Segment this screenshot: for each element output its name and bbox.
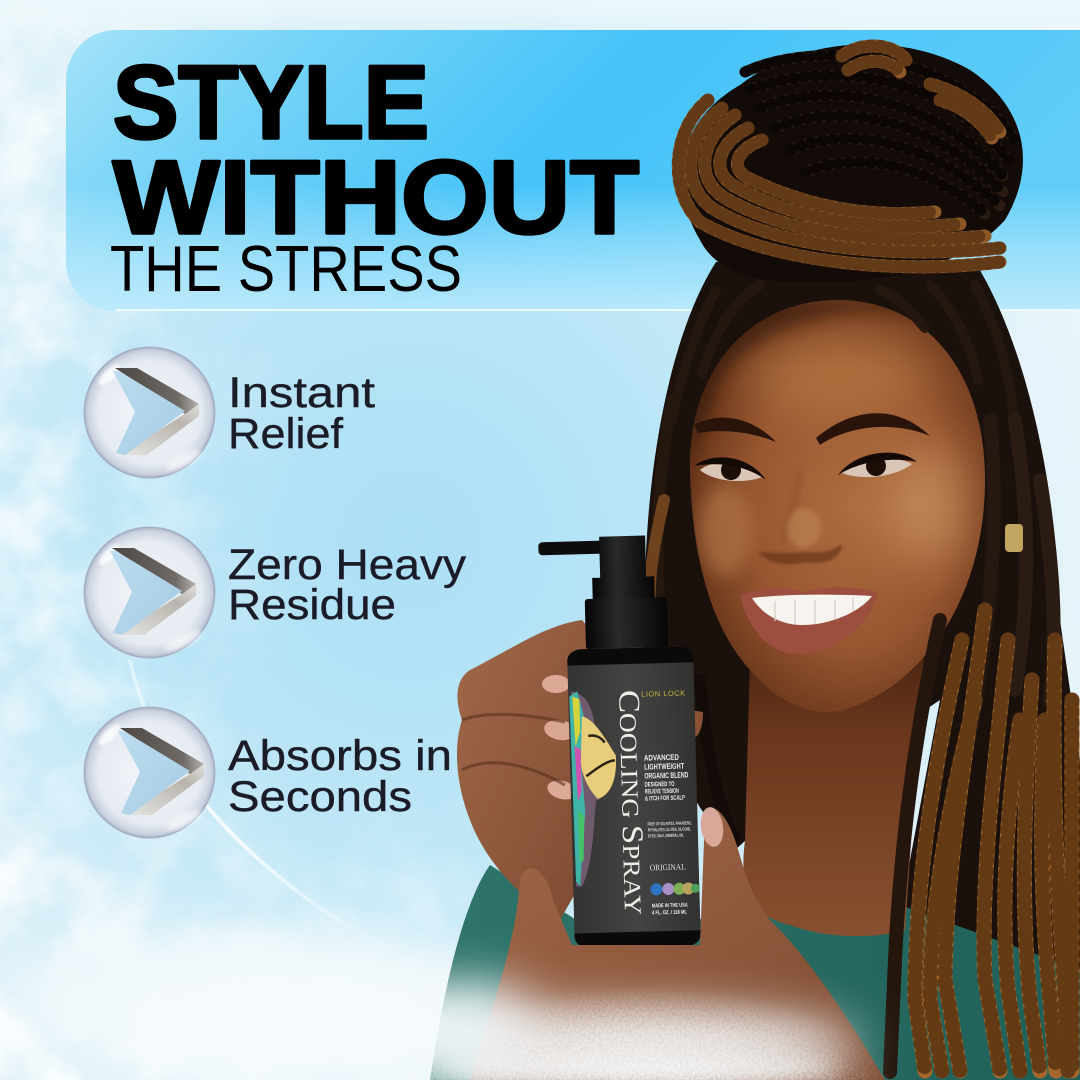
left eyebrow xyxy=(694,418,776,442)
benefit: instant relief: Relief xyxy=(228,410,344,458)
smile xyxy=(740,587,878,654)
woman: back hair silhouette xyxy=(645,262,1080,1080)
product bottle xyxy=(538,534,701,949)
woman: neck and chest xyxy=(743,640,925,936)
hand behind bottle xyxy=(457,620,703,920)
title: THE STRESS xyxy=(110,232,462,305)
benefit: zero heavy residue: Residue xyxy=(228,581,396,629)
bottle text xyxy=(612,688,694,917)
mist over lower hand xyxy=(202,945,892,1080)
bottle text: LION LOCK xyxy=(641,689,685,699)
bottle text: RELIEVE TENSION xyxy=(645,788,679,796)
bottle text: ADVANCED xyxy=(644,753,679,763)
nose xyxy=(758,470,842,564)
bottle text: ORGANIC BLEND xyxy=(644,770,689,781)
right eyebrow xyxy=(816,413,930,445)
benefit: zero heavy residue xyxy=(84,526,467,658)
benefit: absorbs in seconds xyxy=(84,706,452,838)
woman: face xyxy=(690,300,985,712)
woman: green top xyxy=(430,865,1080,1080)
benefit: instant relief xyxy=(84,346,375,478)
header banner xyxy=(66,30,1080,311)
bottle body xyxy=(567,646,701,948)
woman: left locs xyxy=(650,400,735,840)
bottle text: C OOLING S PRAY xyxy=(612,690,651,915)
bottle text: FREE OF SULFATES, PARABENS, xyxy=(648,820,692,827)
title: WITHOUT xyxy=(113,140,639,256)
benefit: absorbs in seconds: Absorbs in xyxy=(228,732,452,780)
bottle text: DYES, WAX, MINERAL OIL xyxy=(648,833,684,839)
pump xyxy=(538,535,668,650)
bottle text: LIGHTWEIGHT xyxy=(644,762,684,772)
woman: right locs xyxy=(890,420,1072,1072)
bottle text: & ITCH FOR SCALP xyxy=(645,795,685,803)
right eye xyxy=(838,453,917,477)
decorative swoosh line xyxy=(130,660,400,955)
certification badges xyxy=(650,882,700,895)
bottle text: 4 FL. OZ. / 118 ML xyxy=(652,910,688,916)
hair bead xyxy=(1005,524,1023,552)
front hand holding bottle xyxy=(470,806,885,1080)
bottle text: DESIGNED TO xyxy=(645,781,675,789)
woman: hair bun xyxy=(678,44,1023,282)
lion illustration xyxy=(569,690,619,886)
bottle text: ORIGINAL xyxy=(650,862,686,873)
benefit: absorbs in seconds: Seconds xyxy=(228,773,412,821)
left eye xyxy=(694,457,766,481)
benefit: instant relief: Instant xyxy=(228,369,375,417)
title: STYLE xyxy=(113,45,429,161)
bottle text: MADE IN THE USA xyxy=(652,903,688,909)
woman: hairline twists xyxy=(672,285,1014,420)
title xyxy=(110,45,639,305)
benefit: zero heavy residue: Zero Heavy xyxy=(228,541,467,589)
bottle text: PHTHALATES, GLUTEN, SILICONE, xyxy=(648,826,691,833)
